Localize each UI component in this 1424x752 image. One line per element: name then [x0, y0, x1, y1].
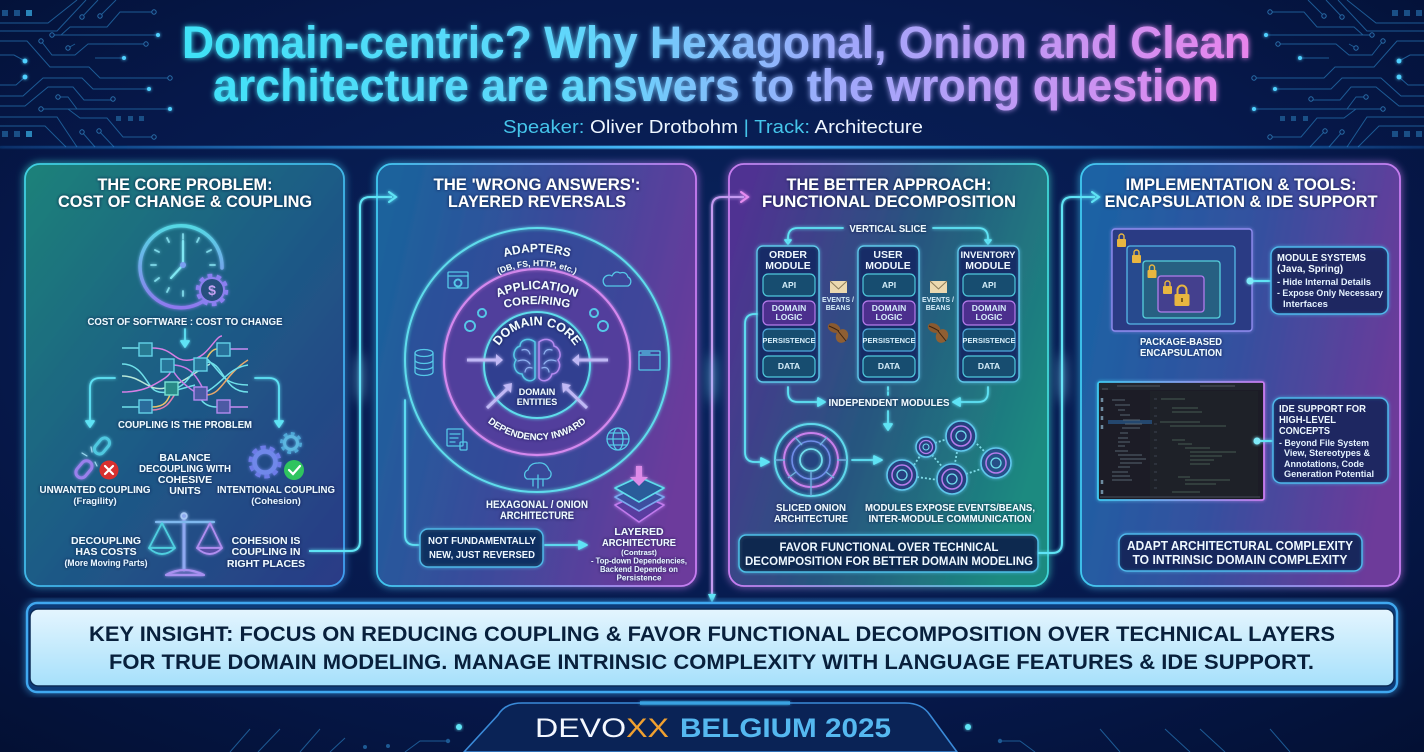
module: order: MODULE: [765, 260, 811, 272]
label: package-based encapsulation: ENCAPSULATION: [1140, 347, 1222, 359]
icon: layered stack with arrow: [615, 466, 664, 522]
callout: IDE support: View, Stereotypes &: [1284, 448, 1370, 459]
arrow: down to coupling: [181, 329, 189, 347]
heading: implementation and tools: [1104, 175, 1378, 211]
panel: better approach: [0, 164, 1424, 752]
heading: better approach: [762, 175, 1016, 211]
label: ring names: [487, 242, 586, 442]
callout: IDE support: Annotations, Code: [1284, 459, 1364, 470]
arrows: modules to independent label: [788, 387, 988, 430]
arrow: panel two to panel three and insight: [712, 192, 748, 598]
callout: adapt complexity: [1119, 534, 1362, 571]
label: hexagonal onion architecture: [486, 499, 588, 522]
module: inventory: DATA: [978, 361, 1000, 371]
callout: favor functional: [739, 535, 1038, 572]
icon: sliced onion: [775, 424, 847, 496]
arrows: dependency inward: [467, 354, 608, 408]
callout: not fundamentally new: NOT FUNDAMENTALLY: [428, 535, 536, 547]
label: sliced onion: ARCHITECTURE: [774, 513, 848, 525]
diagram: connected modules: [887, 421, 1011, 494]
module: order: LOGIC: [776, 312, 802, 322]
label: cohesion is coupling: [227, 535, 305, 570]
icons: adapter symbols: [415, 272, 660, 488]
icon: clock with cost gear: [140, 226, 226, 308]
logo: Devoxx Belgium 2025: BELGIUM 2025: [680, 713, 891, 743]
label: balance decoupling: COHESIVE: [158, 474, 212, 486]
label: sliced onion: [774, 502, 848, 525]
module: order: API: [782, 280, 796, 290]
module: inventory: MODULE: [965, 260, 1011, 272]
module: inventory: LOGIC: [976, 312, 1002, 322]
logo: Devoxx Belgium 2025: [535, 713, 891, 743]
diagram: concentric architecture rings: [402, 224, 672, 496]
callout: IDE support: Generation Potential: [1284, 469, 1374, 480]
callout: module systems: MODULE SYSTEMS: [1277, 253, 1366, 264]
module: user: PERSISTENCE: [863, 336, 915, 345]
text: key insight: FOR TRUE DOMAIN MODELING. MANAGE INTRINSIC COMPLEXITY WITH LANGUAGE FEATURES & IDE SUPPORT.: [109, 651, 1314, 674]
panel: core problem: [25, 164, 344, 586]
title: Domain-centric? Why Hexagonal, Onion and Clean: [182, 17, 1251, 68]
label: layered architecture: LAYERED: [614, 526, 664, 538]
footer: conference badge: [464, 701, 957, 752]
connector: ring to callout: [405, 400, 420, 545]
header divider: [0, 146, 1424, 148]
label: unwanted coupling: (Fragility): [73, 496, 117, 507]
heading: better approach: FUNCTIONAL DECOMPOSITION: [762, 192, 1016, 211]
label: sliced onion: SLICED ONION: [776, 502, 846, 514]
label: cost of software: COST OF SOFTWARE : COST TO CHANGE: [88, 316, 282, 328]
connector: packages to module systems: [1246, 278, 1271, 284]
circuit traces: top left: [0, 0, 172, 147]
heading: implementation and tools: ENCAPSULATION & IDE SUPPORT: [1104, 192, 1378, 211]
callout: module systems: (Java, Spring): [1277, 264, 1343, 275]
heading: core problem: COST OF CHANGE & COUPLING: [58, 192, 312, 211]
callout: favor functional: DECOMPOSITION FOR BETTER DOMAIN MODELING: [745, 554, 1033, 568]
panel: key insight: [27, 603, 1397, 692]
label: layered architecture: ARCHITECTURE: [602, 537, 676, 549]
label: ring names: APPLICATION: [496, 279, 580, 298]
label: intentional coupling: INTENTIONAL COUPLING: [217, 484, 335, 496]
label: package-based encapsulation: PACKAGE-BASED: [1140, 336, 1222, 348]
module: order: DATA: [778, 361, 800, 371]
module: order: ORDER: [769, 249, 807, 261]
label: decoupling has costs: [64, 535, 148, 569]
diagram: tangled coupling network: [122, 336, 248, 413]
module: user: MODULE: [865, 260, 911, 272]
arrow: onion to module network: [852, 456, 882, 464]
icon: IDE screenshot: [1098, 382, 1264, 500]
text: key insight: [89, 623, 1335, 674]
label: layered architecture: Persistence: [617, 574, 662, 582]
label: vertical slice: VERTICAL SLICE: [850, 223, 926, 235]
label: ring names: CORE/RING: [502, 294, 571, 309]
callout: favor functional: FAVOR FUNCTIONAL OVER TECHNICAL: [780, 540, 998, 554]
label: coupling is the problem: COUPLING IS THE PROBLEM: [118, 419, 252, 431]
text: key insight: KEY INSIGHT: FOCUS ON REDUCING COUPLING & FAVOR FUNCTIONAL DECOMPOSITION OVER TECHNICAL LAYERS: [89, 623, 1335, 646]
label: cohesion is coupling: COUPLING IN: [232, 546, 300, 558]
module: user: API: [882, 280, 896, 290]
label: domain entities: ENTITIES: [517, 397, 557, 407]
label: balance decoupling: [139, 452, 231, 497]
connector glow points: [358, 353, 1064, 403]
label: balance decoupling: BALANCE: [159, 452, 211, 464]
diagram: nested packages with locks: [1112, 229, 1252, 331]
label: balance decoupling: DECOUPLING WITH: [139, 463, 231, 475]
label: domain entities: [517, 387, 557, 407]
label: unwanted coupling: [40, 484, 150, 507]
title: [182, 17, 1251, 111]
module: user: DATA: [878, 361, 900, 371]
label: cohesion is coupling: RIGHT PLACES: [227, 558, 305, 570]
connector: IDE to support callout: [1254, 438, 1273, 444]
callout: not fundamentally new: NEW, JUST REVERSED: [429, 549, 535, 561]
arrows: vertical slice to modules: [785, 228, 991, 244]
module: order: DOMAIN: [772, 303, 806, 313]
label: layered architecture: [591, 526, 687, 582]
arrow: panel three to panel four: [1038, 192, 1099, 553]
label: ring names: DOMAIN CORE: [490, 315, 583, 346]
label: modules expose events: [865, 502, 1035, 525]
label: balance decoupling: UNITS: [169, 485, 201, 497]
label: layered architecture: (Contrast): [621, 548, 657, 557]
label: package-based encapsulation: [1140, 336, 1222, 359]
module: order: [757, 246, 819, 382]
module: order: PERSISTENCE: [763, 336, 815, 345]
panel: wrong answers: [20, 157, 1407, 752]
subtitle: speaker and track: Speaker: Oliver Drotbohm | Track: Architecture: [503, 116, 923, 137]
callout: module systems: - Hide Internal Details: [1277, 277, 1371, 288]
callout: adapt complexity: ADAPT ARCHITECTURAL COMPLEXITY: [1127, 539, 1354, 553]
label: ring names: ADAPTERS: [503, 242, 572, 258]
label: independent modules: INDEPENDENT MODULES: [828, 397, 950, 409]
arrow: into key insight: [708, 594, 716, 603]
heading: wrong answers: LAYERED REVERSALS: [448, 192, 626, 211]
label: ring names: DEPENDENCY INWARD: [487, 416, 586, 442]
circuit traces: bottom: [0, 724, 1424, 752]
callout: module systems: - Expose Only Necessary: [1277, 288, 1384, 299]
icon: events and beans left: [822, 281, 855, 345]
label: decoupling has costs: HAS COSTS: [75, 546, 137, 558]
label: ring names: (DB, FS, HTTP, etc.): [496, 258, 578, 277]
callout: IDE support: [1273, 398, 1388, 483]
heading: wrong answers: THE 'WRONG ANSWERS':: [434, 175, 640, 194]
callout: IDE support: IDE SUPPORT FOR: [1279, 404, 1367, 415]
icon: clock with cost gear: $: [208, 282, 216, 298]
label: hexagonal onion architecture: ARCHITECTURE: [500, 510, 574, 522]
label: hexagonal onion architecture: HEXAGONAL / ONION: [486, 499, 588, 511]
label: domain entities: DOMAIN: [519, 387, 555, 397]
label: modules expose events: MODULES EXPOSE EVENTS/BEANS,: [865, 502, 1035, 514]
label: intentional coupling: (Cohesion): [251, 496, 301, 507]
arrow: to unwanted coupling: [86, 378, 115, 427]
callout: IDE support: CONCEPTS: [1279, 426, 1330, 437]
circuit traces: top right: [1252, 0, 1424, 147]
module: user: USER: [873, 249, 903, 261]
module: user: [858, 246, 919, 382]
callout: IDE support: HIGH-LEVEL: [1279, 415, 1336, 426]
label: layered architecture: - Top-down Dependencies,: [591, 556, 687, 566]
icon: broken chain with red cross: [74, 436, 118, 480]
icon: domain brain: [514, 339, 560, 381]
callout: not fundamentally new: [420, 529, 543, 567]
label: unwanted coupling: UNWANTED COUPLING: [40, 484, 150, 496]
heading: implementation and tools: IMPLEMENTATION & TOOLS:: [1126, 175, 1356, 194]
label: layered architecture: Backend Depends on: [600, 565, 678, 574]
icon: events and beans right: BEANS: [926, 305, 951, 312]
module: inventory: INVENTORY: [961, 250, 1016, 261]
arrow: to layered architecture: [545, 541, 587, 549]
module: inventory: DOMAIN: [972, 303, 1006, 313]
arrow: panel one to panel two: [309, 192, 396, 551]
label: intentional coupling: [217, 484, 335, 507]
module: inventory: API: [982, 280, 996, 290]
label: decoupling has costs: (More Moving Parts): [64, 558, 148, 569]
panel: implementation and tools: [0, 164, 1424, 752]
module: inventory: PERSISTENCE: [963, 336, 1015, 345]
heading: better approach: THE BETTER APPROACH:: [786, 175, 992, 194]
icon: events and beans left: BEANS: [826, 305, 851, 312]
callout: module systems: Interfaces: [1283, 299, 1328, 310]
icon: events and beans right: EVENTS /: [922, 297, 954, 304]
callout: module systems: [1271, 247, 1388, 314]
label: decoupling has costs: DECOUPLING: [71, 535, 141, 547]
heading: wrong answers: [434, 175, 640, 211]
icon: gears with green check: [251, 434, 304, 480]
logo: Devoxx Belgium 2025: DEVO XX: [535, 713, 669, 743]
label: cohesion is coupling: COHESION IS: [232, 535, 300, 547]
icon: events and beans right: [922, 281, 954, 345]
module: inventory: [958, 246, 1019, 382]
icon: balance scale: [149, 513, 222, 575]
connector: domain logic to sliced onion: [745, 314, 769, 466]
module: user: LOGIC: [876, 312, 902, 322]
icon: events and beans left: EVENTS /: [822, 297, 854, 304]
module: user: DOMAIN: [872, 303, 906, 313]
title: architecture are answers to the wrong question: [213, 60, 1219, 111]
arrow: to intentional coupling: [255, 378, 283, 427]
label: modules expose events: INTER-MODULE COMMUNICATION: [868, 513, 1032, 525]
callout: IDE support: - Beyond File System: [1279, 438, 1369, 449]
heading: core problem: [58, 175, 312, 211]
heading: core problem: THE CORE PROBLEM:: [98, 175, 272, 194]
callout: adapt complexity: TO INTRINSIC DOMAIN COMPLEXITY: [1132, 553, 1348, 567]
